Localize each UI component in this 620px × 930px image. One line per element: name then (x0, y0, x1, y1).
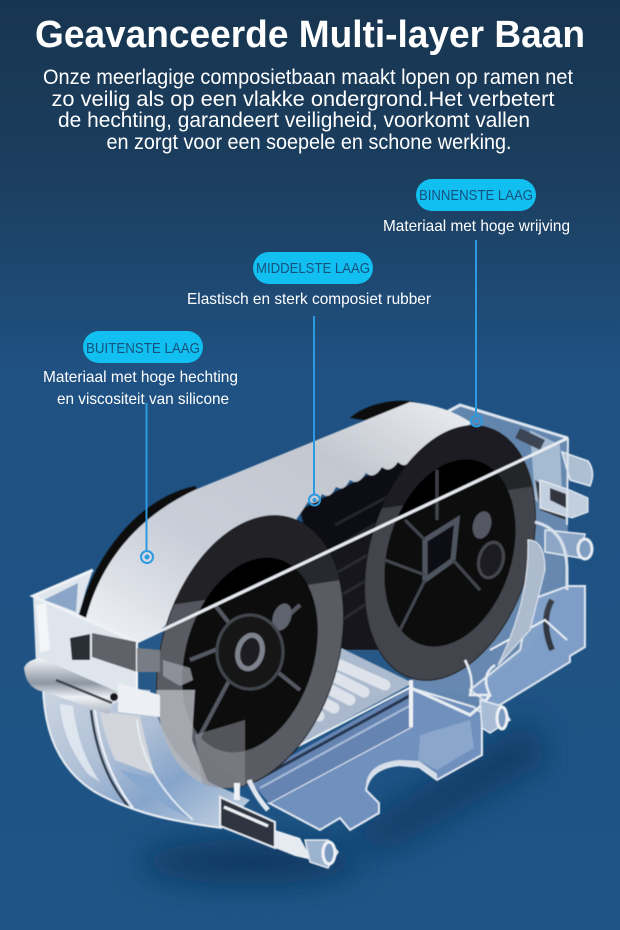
intro text: Onze meerlagige composietbaan maakt lopen op ramen net (43, 66, 573, 89)
rear wheels (78, 401, 415, 640)
right wheel (364, 424, 537, 682)
right gear teeth (498, 540, 545, 665)
hub diamond (425, 520, 457, 580)
silver track belt (85, 402, 472, 642)
lower bowl housing (43, 685, 250, 828)
bottom clip and pin left (220, 780, 338, 868)
intro text: de hechting, garandeert veiligheid, voorkomt vallen (58, 109, 530, 132)
right pins and side block (470, 452, 593, 708)
callout: buitenste laag (43, 331, 238, 563)
callout: binnenste laag: Materiaal met hoge wrijving (383, 218, 570, 235)
drive gear between wheels (300, 448, 440, 650)
bottom translucent plate (249, 688, 482, 830)
callout: buitenste laag: BUITENSTE LAAG (86, 340, 200, 357)
callout: buitenste laag: en viscositeit van silicone (57, 391, 229, 408)
callout: binnenste laag (383, 179, 570, 426)
device: transparent track module (24, 401, 593, 868)
translucent front wall (137, 438, 568, 790)
left end housing (33, 570, 160, 706)
left axle pin (24, 658, 193, 717)
callout: middelste laag (187, 252, 432, 506)
rear case (411, 405, 568, 710)
callout: middelste laag: Elastisch en sterk composiet rubber (187, 291, 432, 308)
callout: middelste laag: MIDDELSTE LAAG (256, 260, 370, 277)
lower wheel overlay through wall (156, 689, 246, 789)
title: Geavanceerde Multi-layer Baan (35, 14, 585, 56)
drop shadow under device (140, 720, 550, 884)
intro text: en zorgt voor een soepele en schone werking. (106, 131, 512, 154)
intro text: zo veilig als op een vlakke ondergrond.Het verbetert (52, 88, 555, 111)
callout: buitenste laag: Materiaal met hoge hechting (43, 369, 238, 386)
callout: binnenste laag: BINNENSTE LAAG (419, 187, 533, 204)
bottom clip and pin right (411, 660, 510, 733)
left wheel (156, 514, 344, 790)
intro text (43, 66, 573, 154)
white ribbed rollers (270, 645, 413, 752)
